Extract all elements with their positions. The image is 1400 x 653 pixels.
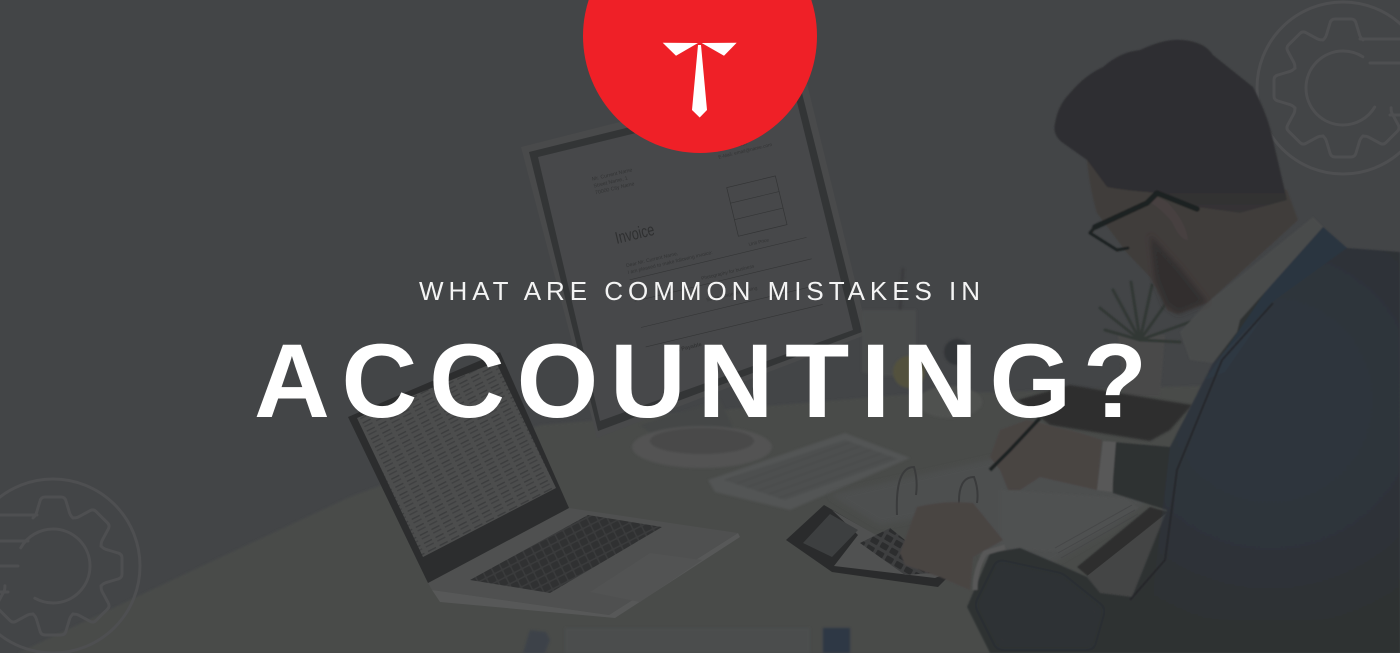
invoice document text: Mr. Current Name	[591, 167, 633, 183]
logo: red circle	[583, 0, 817, 153]
monitor with invoice	[521, 75, 868, 438]
man: businessman	[900, 40, 1400, 653]
laptop trackpad	[590, 553, 702, 602]
invoice document text: Total Payable	[667, 342, 702, 356]
neck and face	[1087, 160, 1298, 314]
pen holder	[862, 268, 916, 376]
invoice document text: I am pleased to make following invoice:	[627, 250, 713, 276]
desk dark edge	[1077, 507, 1168, 578]
hair	[1054, 40, 1287, 213]
invoice document text: 70000 City Name	[595, 181, 635, 196]
laptop	[348, 352, 740, 618]
invoice document text: Tel: 0123 4567	[716, 141, 749, 154]
desk surface	[18, 385, 1230, 653]
rubber band ball	[893, 339, 982, 418]
calculator	[786, 505, 948, 587]
glasses	[1090, 193, 1197, 250]
plant	[1100, 282, 1190, 396]
icon: gear outline top right	[1257, 2, 1400, 174]
icon: gear outline bottom left	[0, 479, 140, 653]
invoice document text: Single image processing	[706, 285, 758, 303]
heading: subtitle: WHAT ARE COMMON MISTAKES IN	[419, 276, 980, 306]
invoice document text: Unit Price	[748, 237, 770, 248]
invoice document text	[590, 126, 826, 364]
invoice document text: Photography for business	[701, 263, 756, 282]
laptop keyboard	[470, 515, 662, 593]
heading: main title: ACCOUNTING?	[254, 323, 1147, 440]
icon: white tie	[663, 43, 737, 118]
invoice document text: Dear Mr. Current Name,	[626, 251, 679, 269]
lower hand	[900, 502, 1005, 590]
invoice document text: Street Name, 1	[593, 176, 629, 190]
suit jacket	[967, 227, 1400, 653]
invoice document text: 7000 City Name	[715, 133, 750, 147]
black notebook	[1018, 385, 1192, 441]
monitor stand	[632, 400, 772, 468]
white keyboard	[708, 433, 910, 510]
laptop lid	[348, 352, 569, 583]
stationery at bottom edge	[523, 628, 850, 653]
shirt	[1180, 217, 1323, 363]
laptop screen spreadsheet	[357, 362, 556, 557]
invoice document text: Invoice	[614, 221, 656, 248]
laptop base	[428, 508, 738, 615]
invoice document text: E-Mail: email@name.com	[718, 142, 773, 161]
binder and papers	[830, 455, 1150, 570]
beard	[1150, 235, 1207, 314]
upper hand with pen	[990, 418, 1116, 492]
ear	[1146, 197, 1188, 240]
